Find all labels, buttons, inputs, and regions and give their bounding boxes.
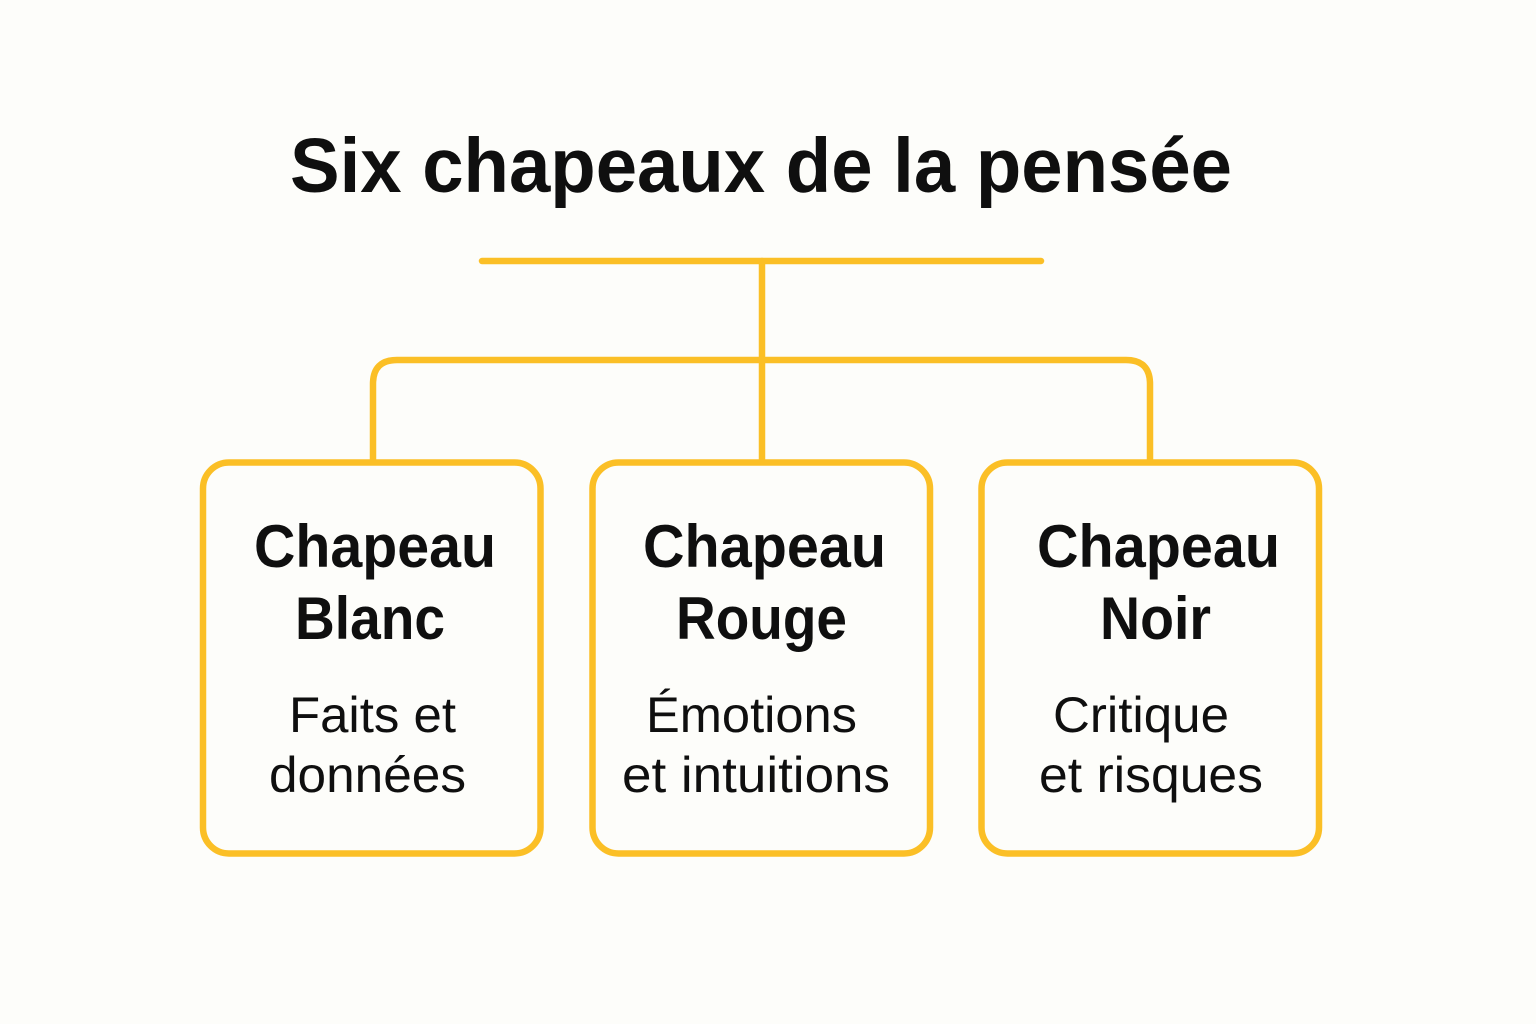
panel: Chapeau Rouge xyxy=(592,462,930,854)
text: Critique et risques: et risques xyxy=(1039,747,1263,803)
connector tree xyxy=(373,261,1150,462)
panel: Chapeau Noir xyxy=(982,462,1319,854)
text: Émotions et intuitions: et intuitions xyxy=(622,747,890,803)
panel: Chapeau Blanc xyxy=(203,462,540,854)
text: Émotions et intuitions: Émotions xyxy=(646,687,857,743)
heading: Chapeau Rouge: Chapeau xyxy=(643,513,886,580)
text: Critique et risques xyxy=(1039,687,1263,803)
heading: Chapeau Blanc: Blanc xyxy=(295,585,445,652)
heading: Chapeau Rouge xyxy=(643,513,886,652)
heading: Chapeau Blanc: Chapeau xyxy=(254,513,496,580)
heading: Chapeau Blanc xyxy=(254,513,496,652)
text: Faits et données xyxy=(269,687,466,803)
text: Faits et données: Faits et xyxy=(289,687,456,743)
text: Critique et risques: Critique xyxy=(1053,687,1229,743)
heading: Chapeau Rouge: Rouge xyxy=(676,585,847,652)
heading: Chapeau Noir xyxy=(1037,513,1280,652)
text: Émotions et intuitions xyxy=(622,687,890,803)
text: Faits et données: données xyxy=(269,747,466,803)
heading: Chapeau Noir: Chapeau xyxy=(1037,513,1280,580)
heading: Chapeau Noir: Noir xyxy=(1100,585,1211,652)
title: Six chapeaux de la pensée xyxy=(290,123,1232,209)
